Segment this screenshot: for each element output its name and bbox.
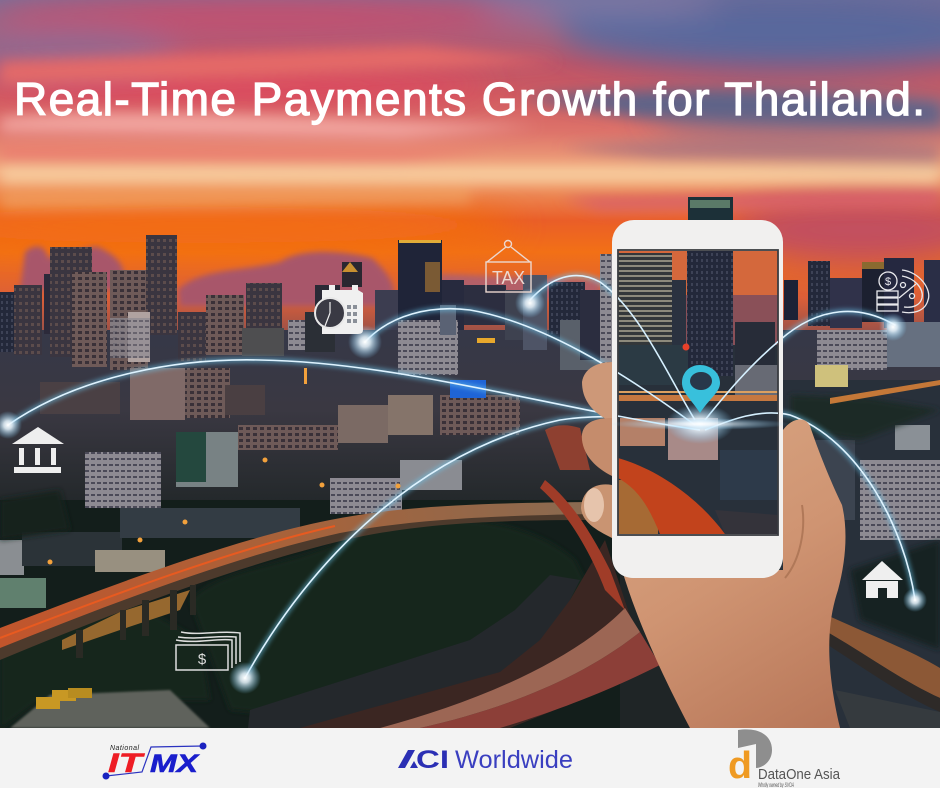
background: city blocks and ground [0,330,940,730]
phone screen [618,251,778,535]
index finger [582,362,612,422]
icon: house [862,561,903,598]
hand behind the phone [622,570,840,728]
logo: ACI Worldwide: CI [416,746,449,774]
icon: tax sign [486,240,531,292]
icon: calendar and clock [315,285,363,334]
screen border [618,250,778,535]
icon: banknotes [176,632,240,670]
central glow [610,404,790,444]
logo: National ITMX: National [110,745,139,752]
connection arcs (glowing lines) [8,276,915,678]
ring finger [581,484,612,538]
phone body [612,220,783,578]
background: sunset sky [0,0,940,360]
logo: ACI Worldwide: Worldwide [455,746,573,774]
icon: banknotes: $ [198,651,207,668]
logo: National ITMX: IT [108,748,146,778]
expressway, lower right [820,380,940,728]
logo: National ITMX [102,742,206,780]
phone [612,220,783,578]
icon: tax sign: TAX [492,268,525,288]
dark tree canopy [0,395,940,730]
bare ground with parked trucks [10,688,210,728]
arc end glows [0,288,927,694]
icon: coins and percent: $ [885,276,891,288]
skyline towers [0,197,940,375]
billboard [815,365,848,387]
mid-rise buildings in the city [0,338,940,688]
icon: coins and percent [877,270,929,313]
elevated expressway, left [0,502,590,660]
decorative lit tips [342,262,358,272]
arcs drawn over the phone screen [618,296,778,430]
curved long building and main road, bottom centre [248,425,660,728]
hand fingers and thumb over the phone [581,362,845,728]
middle finger [582,418,612,476]
logo: DataOne Asia: d [728,745,752,787]
icon: location pin [682,365,720,413]
low clouds on the horizon [20,246,600,306]
logo: National ITMX: MX [150,750,200,778]
logo: DataOne Asia: DataOne Asia [758,766,841,783]
footer strip [0,728,940,788]
logo: ACI Worldwide [398,746,573,774]
thumb [701,419,845,728]
phone bottom edge over the palm [612,540,783,578]
logo: DataOne Asia [728,729,841,788]
icon: bank [12,427,64,473]
decorative rooflines and warm lights [42,338,532,688]
title: Real-Time Payments Growth for Thailand. [14,73,925,125]
